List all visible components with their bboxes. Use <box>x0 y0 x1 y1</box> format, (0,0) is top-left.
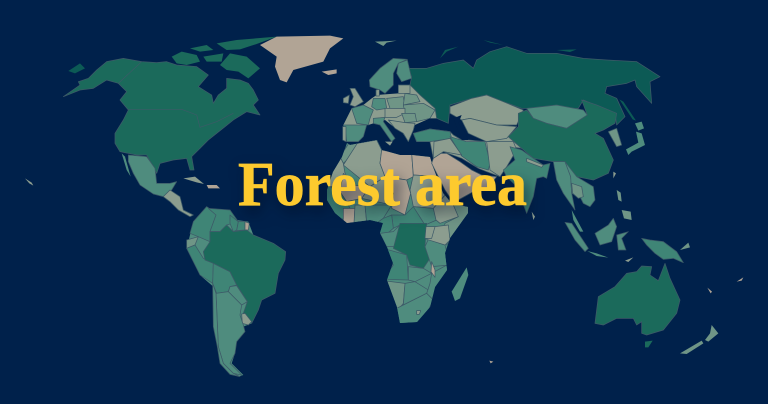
finland <box>397 60 412 82</box>
suriname <box>237 222 245 231</box>
black sea <box>415 118 442 129</box>
borneo <box>595 218 617 245</box>
south america <box>187 207 286 377</box>
taiwan <box>613 172 616 178</box>
romania <box>402 113 417 123</box>
africa north <box>317 140 473 245</box>
central african republic <box>392 206 423 228</box>
south africa <box>397 293 432 323</box>
south sudan <box>413 207 437 225</box>
bolivia <box>213 263 237 293</box>
west asia base <box>413 129 522 177</box>
nepal <box>527 158 543 167</box>
italy <box>373 117 395 142</box>
svalbard <box>375 41 397 46</box>
cameroon <box>378 214 394 238</box>
madagascar <box>452 267 468 301</box>
greenland <box>260 36 343 82</box>
kazakhstan <box>450 95 523 125</box>
timor <box>625 257 633 262</box>
indochina <box>565 162 595 207</box>
afghanistan and pakistan <box>487 142 517 177</box>
peru <box>187 245 213 283</box>
algeria <box>343 140 385 187</box>
libya <box>380 150 413 180</box>
new caledonia <box>707 288 712 293</box>
central asia <box>462 118 517 142</box>
sicily <box>385 142 393 146</box>
mongolia <box>527 105 587 128</box>
caspian sea <box>453 115 468 140</box>
hispaniola <box>207 185 220 188</box>
australia <box>595 263 680 335</box>
myanmar <box>553 162 575 210</box>
mauritius <box>489 361 493 363</box>
western sahara and mauritania <box>330 158 346 187</box>
balkans <box>388 120 415 142</box>
russia <box>407 47 660 125</box>
belarus <box>403 93 420 105</box>
spain <box>343 125 367 142</box>
africa islands <box>452 267 493 363</box>
arctic island ellesmere <box>217 37 277 50</box>
iceland <box>322 69 337 75</box>
iran <box>450 137 490 170</box>
arctic island devon <box>203 53 223 62</box>
ecuador <box>187 237 198 248</box>
mali <box>341 173 365 202</box>
norway and sweden <box>369 58 407 93</box>
brazil <box>203 225 286 323</box>
new britain <box>680 243 690 250</box>
sudan <box>410 175 447 208</box>
java <box>587 251 608 258</box>
cuba <box>183 177 204 184</box>
world map <box>25 36 743 377</box>
africa base <box>327 140 468 323</box>
turkey <box>413 129 452 142</box>
mexico <box>128 155 177 197</box>
portugal <box>343 127 346 142</box>
arctic island banks <box>190 45 213 52</box>
tasmania <box>645 341 653 347</box>
infographic canvas <box>25 36 744 377</box>
chukotka tip <box>68 63 85 73</box>
malawi <box>431 262 435 277</box>
nigeria <box>364 204 392 222</box>
venezuela <box>208 208 238 232</box>
philippines south <box>622 210 632 220</box>
zambia <box>408 267 432 282</box>
ghana and ivory coast <box>343 208 354 223</box>
hokkaido <box>635 122 644 131</box>
ireland <box>343 95 349 103</box>
french guiana <box>245 222 249 230</box>
arabian peninsula <box>432 153 497 205</box>
dr congo <box>393 223 430 268</box>
poland <box>387 97 405 108</box>
north america <box>25 36 343 217</box>
central america <box>163 190 193 217</box>
sri lanka <box>532 212 535 220</box>
paraguay <box>228 286 247 305</box>
iraq and levant <box>433 138 462 158</box>
uruguay <box>242 313 252 325</box>
siberian islands <box>557 49 577 52</box>
germany <box>372 98 387 110</box>
south america base <box>187 207 286 377</box>
argentina <box>216 292 245 375</box>
angola <box>387 249 408 280</box>
alaska border <box>118 62 142 83</box>
benin togo <box>354 205 367 223</box>
oceania and southeast asia <box>565 190 743 354</box>
namibia <box>387 280 405 310</box>
mozambique <box>426 266 447 299</box>
india <box>503 147 550 213</box>
west africa coast <box>327 186 350 220</box>
papua <box>642 238 683 263</box>
arctic island baffin <box>220 53 260 78</box>
usa northern border <box>128 109 233 127</box>
philippines north <box>617 190 622 202</box>
botswana zimbabwe <box>403 282 428 305</box>
colombia <box>190 207 217 242</box>
france <box>352 105 373 125</box>
sumatra <box>565 222 588 252</box>
denmark <box>376 89 379 96</box>
tanzania <box>424 240 446 267</box>
hawaii <box>25 178 33 186</box>
thailand <box>572 183 583 198</box>
canada and usa <box>63 58 260 173</box>
fiji <box>737 277 743 282</box>
uganda <box>425 227 435 238</box>
horn and somalia <box>444 205 468 246</box>
ukraine <box>403 103 435 122</box>
gabon and congo <box>380 225 400 247</box>
sakhalin <box>619 99 636 121</box>
egypt <box>411 155 436 176</box>
arctic island victoria <box>172 52 200 65</box>
baltics <box>398 85 410 93</box>
africa south <box>380 223 450 327</box>
title: Forest area <box>238 151 527 219</box>
chile <box>213 283 240 377</box>
eurasia <box>343 40 660 220</box>
morocco <box>341 144 357 164</box>
chad <box>391 178 411 215</box>
niger <box>362 177 393 205</box>
africa <box>327 140 468 323</box>
uk <box>350 88 363 107</box>
kenya <box>427 225 450 245</box>
honshu <box>626 132 645 155</box>
guyana <box>230 215 238 232</box>
novaya zemlya <box>440 47 458 58</box>
sulawesi <box>617 232 628 250</box>
arctic islands <box>483 40 503 45</box>
ethiopia <box>433 193 458 223</box>
central europe <box>385 108 405 117</box>
new zealand south <box>680 341 703 354</box>
lesotho <box>417 311 421 314</box>
korea <box>608 128 622 147</box>
europe base <box>343 85 437 142</box>
new zealand north <box>705 325 718 342</box>
malay peninsula <box>572 210 583 232</box>
china <box>508 100 617 180</box>
baja california <box>122 153 131 177</box>
